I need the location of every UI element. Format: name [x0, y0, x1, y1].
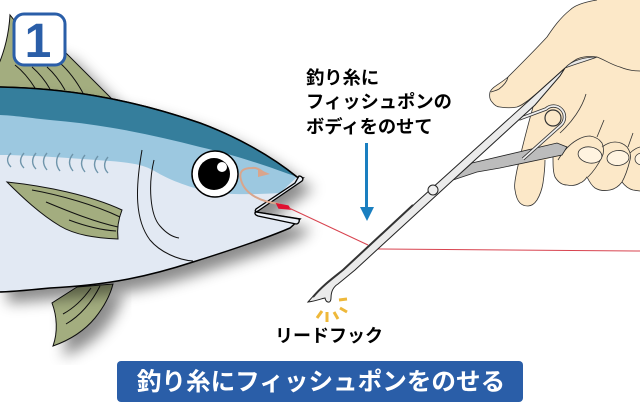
hand fill [490, 0, 640, 206]
eye [192, 151, 238, 197]
hand [490, 0, 640, 206]
spring [519, 106, 564, 159]
dark back stripe [0, 87, 297, 177]
callout text: 釣り糸に [306, 67, 379, 88]
fishing line [289, 208, 640, 251]
ventral fin [52, 284, 113, 346]
number badge [14, 14, 65, 68]
caption bar: 釣り糸にフィッシュポンをのせる [137, 368, 505, 396]
number badge: 1 [25, 15, 51, 68]
dorsal fin [0, 15, 112, 99]
callout text: フィッシュポンの [306, 91, 452, 112]
illustration: fish [0, 15, 303, 346]
pectoral fin [7, 182, 122, 239]
lateral line ticks [8, 153, 108, 173]
red lure [277, 204, 290, 209]
lower handle [453, 143, 567, 180]
callout text [306, 67, 452, 137]
fish pon tool [308, 57, 597, 302]
fish body [0, 87, 303, 292]
pivot rivet [428, 185, 438, 195]
upper jaw [255, 176, 303, 212]
gill lines [137, 150, 193, 261]
light blue flank [0, 88, 297, 194]
arm and blade [308, 68, 565, 302]
lead hook label: リードフック [275, 326, 383, 346]
yellow sparks [317, 299, 347, 322]
thumb-side sliver [565, 57, 597, 68]
blue arrow [360, 143, 374, 221]
blade dark edge [313, 205, 413, 297]
caption bar [117, 361, 523, 402]
fingernails [577, 145, 640, 166]
lower jaw [255, 212, 299, 224]
hook path arrow [240, 168, 280, 204]
callout text: ボディをのせて [306, 116, 433, 137]
hand outlines [490, 0, 640, 206]
